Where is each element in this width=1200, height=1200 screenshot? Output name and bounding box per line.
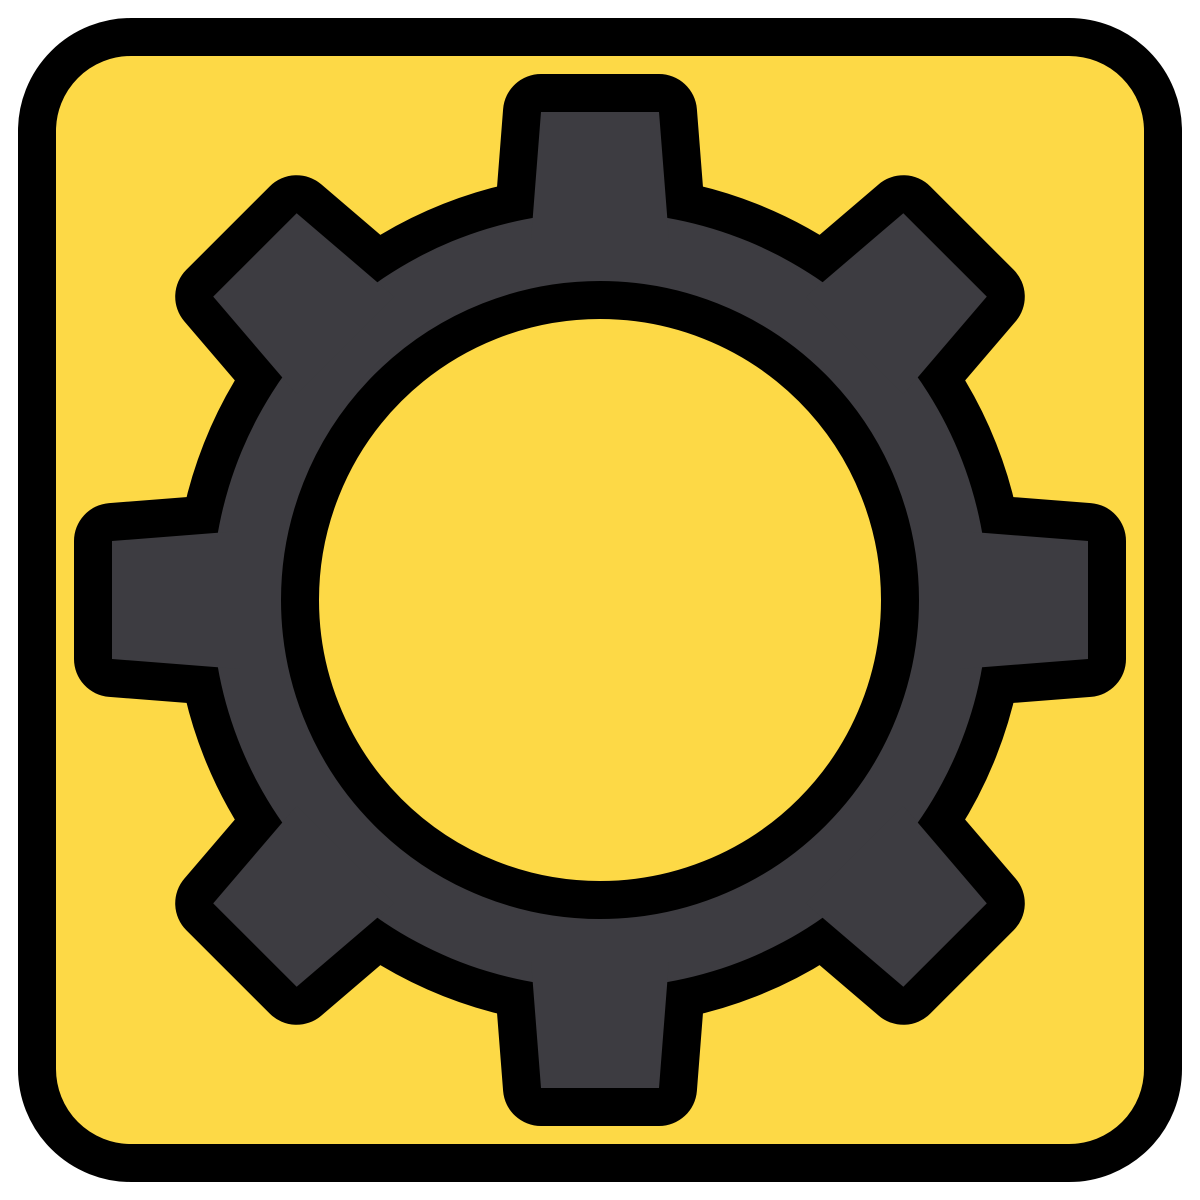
gear center hole <box>300 300 900 900</box>
gear <box>112 112 1088 1088</box>
